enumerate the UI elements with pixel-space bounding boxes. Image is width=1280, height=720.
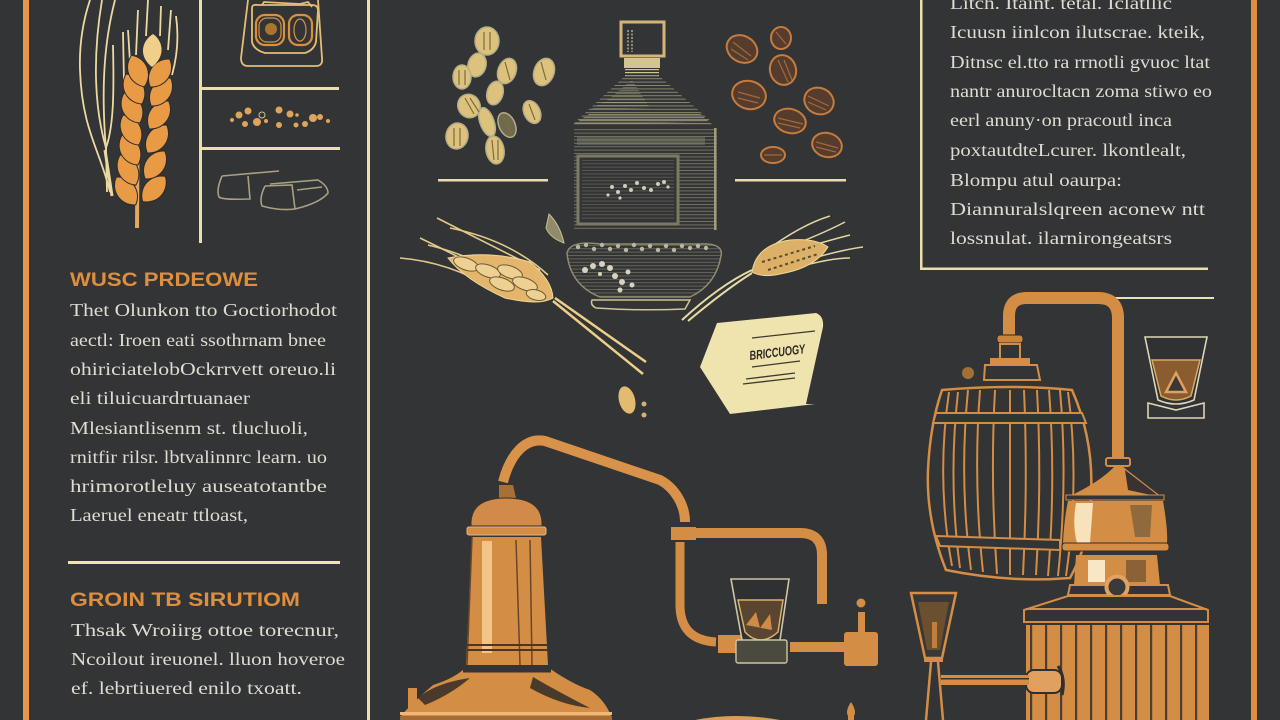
icon: funnel glass on stand bbox=[911, 593, 1029, 720]
text block: left section one: rnitfir rilsr. lbtvalinnrc learn. uo bbox=[70, 447, 327, 467]
text block: right panel: lossnulat. ilarnirongeatsrs bbox=[950, 228, 1172, 248]
condenser pipes bbox=[671, 527, 845, 653]
text block: right panel: nantr anurocltacn zoma stiwo eo bbox=[950, 81, 1212, 101]
text block: left section one: Thet Olunkon tto Goctiorhodot bbox=[70, 300, 337, 320]
icon: pale grains bbox=[444, 27, 558, 165]
tap bbox=[844, 598, 878, 666]
icon: dark roasted grains bbox=[722, 27, 845, 163]
text block: left section two: Thsak Wroiirg ottoe torecnur, bbox=[71, 620, 339, 640]
text block: right panel: eerl anuny·on pracoutl inca bbox=[950, 110, 1172, 130]
heading: left section one: WUSC PRDEOWE bbox=[70, 270, 258, 291]
icon: right copper still bbox=[1024, 458, 1209, 720]
icon: oak barrel bbox=[928, 387, 1091, 579]
text block: left section two: Ncoilout ireuonel. lluon hoveroe bbox=[71, 649, 345, 669]
icon: wheat ear bbox=[80, 0, 179, 228]
text block: left section two bbox=[71, 620, 345, 698]
icon: grain bowl bbox=[567, 243, 721, 310]
text block: left section one bbox=[70, 300, 337, 525]
icon: small whisky glass bbox=[1145, 337, 1207, 418]
text block: left section one: hrimorotleluy auseatotantbe bbox=[70, 476, 327, 496]
text block: left section two: ef. lebrtiuered enilo txoatt. bbox=[71, 678, 302, 698]
pipe bbox=[503, 440, 685, 522]
icon: barrel top fitting bbox=[962, 298, 1118, 462]
still column and base bbox=[400, 485, 612, 720]
text block: left section one: ohiriciatelobOckrrvett oreuo.li bbox=[70, 359, 336, 379]
icon: copper drop bbox=[847, 702, 855, 720]
text block: right panel: Blompu atul oaurpa: bbox=[950, 170, 1122, 190]
pot bbox=[1024, 458, 1208, 622]
icon: jar of grain bbox=[241, 0, 322, 66]
icon: copper dish bbox=[695, 716, 780, 720]
icon: scattered grains bbox=[230, 106, 330, 128]
icon: left barley ear bbox=[400, 218, 646, 374]
icon: whisky glass on still bbox=[731, 579, 789, 663]
label text: BRICCUOGY bbox=[749, 341, 807, 363]
icon: right barley ear bbox=[682, 216, 863, 321]
tank bbox=[1026, 625, 1208, 720]
text block: right panel: Ditnsc el.tto ra rrnotli gvuoc ltat bbox=[950, 52, 1210, 72]
icon: fallen seed bbox=[616, 384, 646, 418]
text block: right panel: Diannuralslqreen aconew ntt bbox=[950, 199, 1205, 219]
icon: small husk bbox=[546, 214, 564, 243]
icon: left copper still bbox=[400, 440, 878, 720]
text block: left section one: eli tiluicuardrtuanaer bbox=[70, 388, 250, 408]
text block: left section one: aectl: Iroen eati ssothrnam bnee bbox=[70, 330, 326, 350]
text block: right panel: Icuusn iinlcon ilutscrae. kteik, bbox=[950, 22, 1205, 42]
tap fitting bbox=[1026, 666, 1063, 695]
text block: left section one: Mlesiantlisenm st. tlucluoli, bbox=[70, 418, 308, 438]
text block: left section one: Laeruel eneatr ttloast, bbox=[70, 505, 248, 525]
icon: malt blocks bbox=[218, 171, 328, 210]
icon: paper label bbox=[700, 313, 823, 414]
text block: right panel: poxtautdteLcurer. lkontlealt, bbox=[950, 140, 1186, 160]
heading: left section two: GROIN TB SIRUTIOM bbox=[70, 590, 300, 611]
icon: etched bottle bbox=[571, 22, 717, 230]
text block: right panel bbox=[950, 0, 1212, 248]
